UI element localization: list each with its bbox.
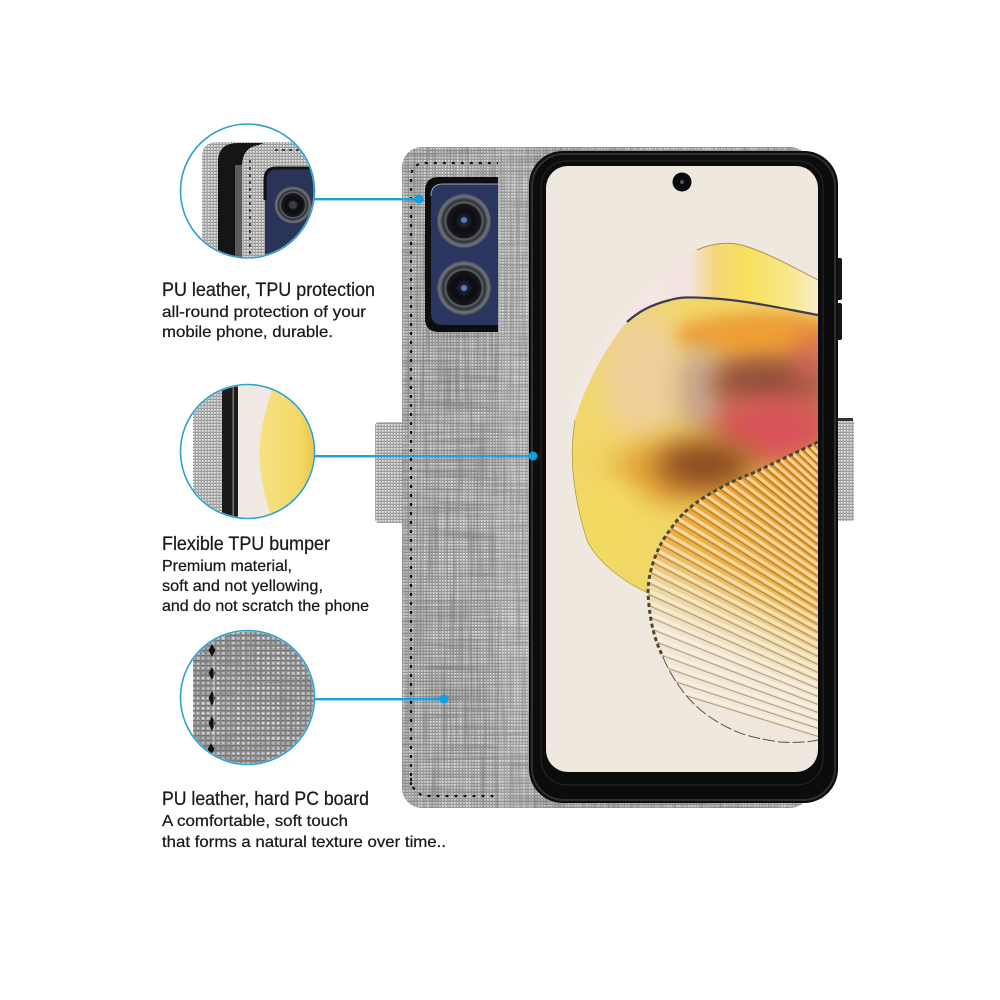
camera lens bottom: [437, 261, 491, 315]
stitching: [411, 163, 498, 796]
text block: PU leather, TPU protection: all-round protection of your: [162, 304, 367, 321]
case body: [402, 147, 810, 808]
ribbed disc: [646, 440, 818, 743]
side buttons: [836, 258, 842, 340]
text block: PU leather, TPU protection: [162, 280, 375, 341]
circle inset: camera corner detail: [180, 124, 320, 270]
text block: Flexible TPU bumper: Premium material,: [162, 558, 292, 575]
text block: Flexible TPU bumper: soft and not yellowing,: [162, 578, 323, 595]
wallet case: [375, 147, 854, 808]
wallpaper artwork: [572, 242, 818, 743]
bumper: [529, 151, 838, 803]
text block: PU leather, hard PC board: that forms a natural texture over time..: [162, 834, 446, 851]
callout 2 connector: [314, 452, 538, 460]
phone: [518, 145, 845, 803]
text block: PU leather, hard PC board: [162, 789, 446, 851]
callout 3 connector: [314, 694, 448, 704]
text block: PU leather, hard PC board: PU leather, hard PC board: [162, 789, 369, 810]
callout 1 connector: [314, 194, 424, 204]
right clasp strap: [830, 418, 854, 521]
circle inset: TPU bumper detail: [180, 380, 320, 525]
text block: PU leather, TPU protection: mobile phone, durable.: [162, 324, 333, 341]
camera lens top: [437, 194, 491, 248]
text block: PU leather, TPU protection: PU leather, TPU protection: [162, 280, 375, 301]
pale sweep and upper yellow petal: [692, 242, 818, 314]
text block: PU leather, hard PC board: A comfortable, soft touch: [162, 813, 348, 830]
text block: Flexible TPU bumper: [162, 534, 369, 615]
text block: Flexible TPU bumper: Flexible TPU bumper: [162, 534, 331, 555]
text block: Flexible TPU bumper: and do not scratch the phone: [162, 598, 369, 615]
left clasp strap: [375, 422, 409, 523]
circle inset: leather texture detail: [180, 625, 318, 770]
main blurred blob: [572, 298, 818, 592]
camera cutout: [425, 177, 498, 332]
blob outline: [572, 420, 648, 593]
selfie camera: [672, 172, 692, 192]
dark arc on blob: [627, 297, 818, 322]
screen: [546, 166, 818, 772]
